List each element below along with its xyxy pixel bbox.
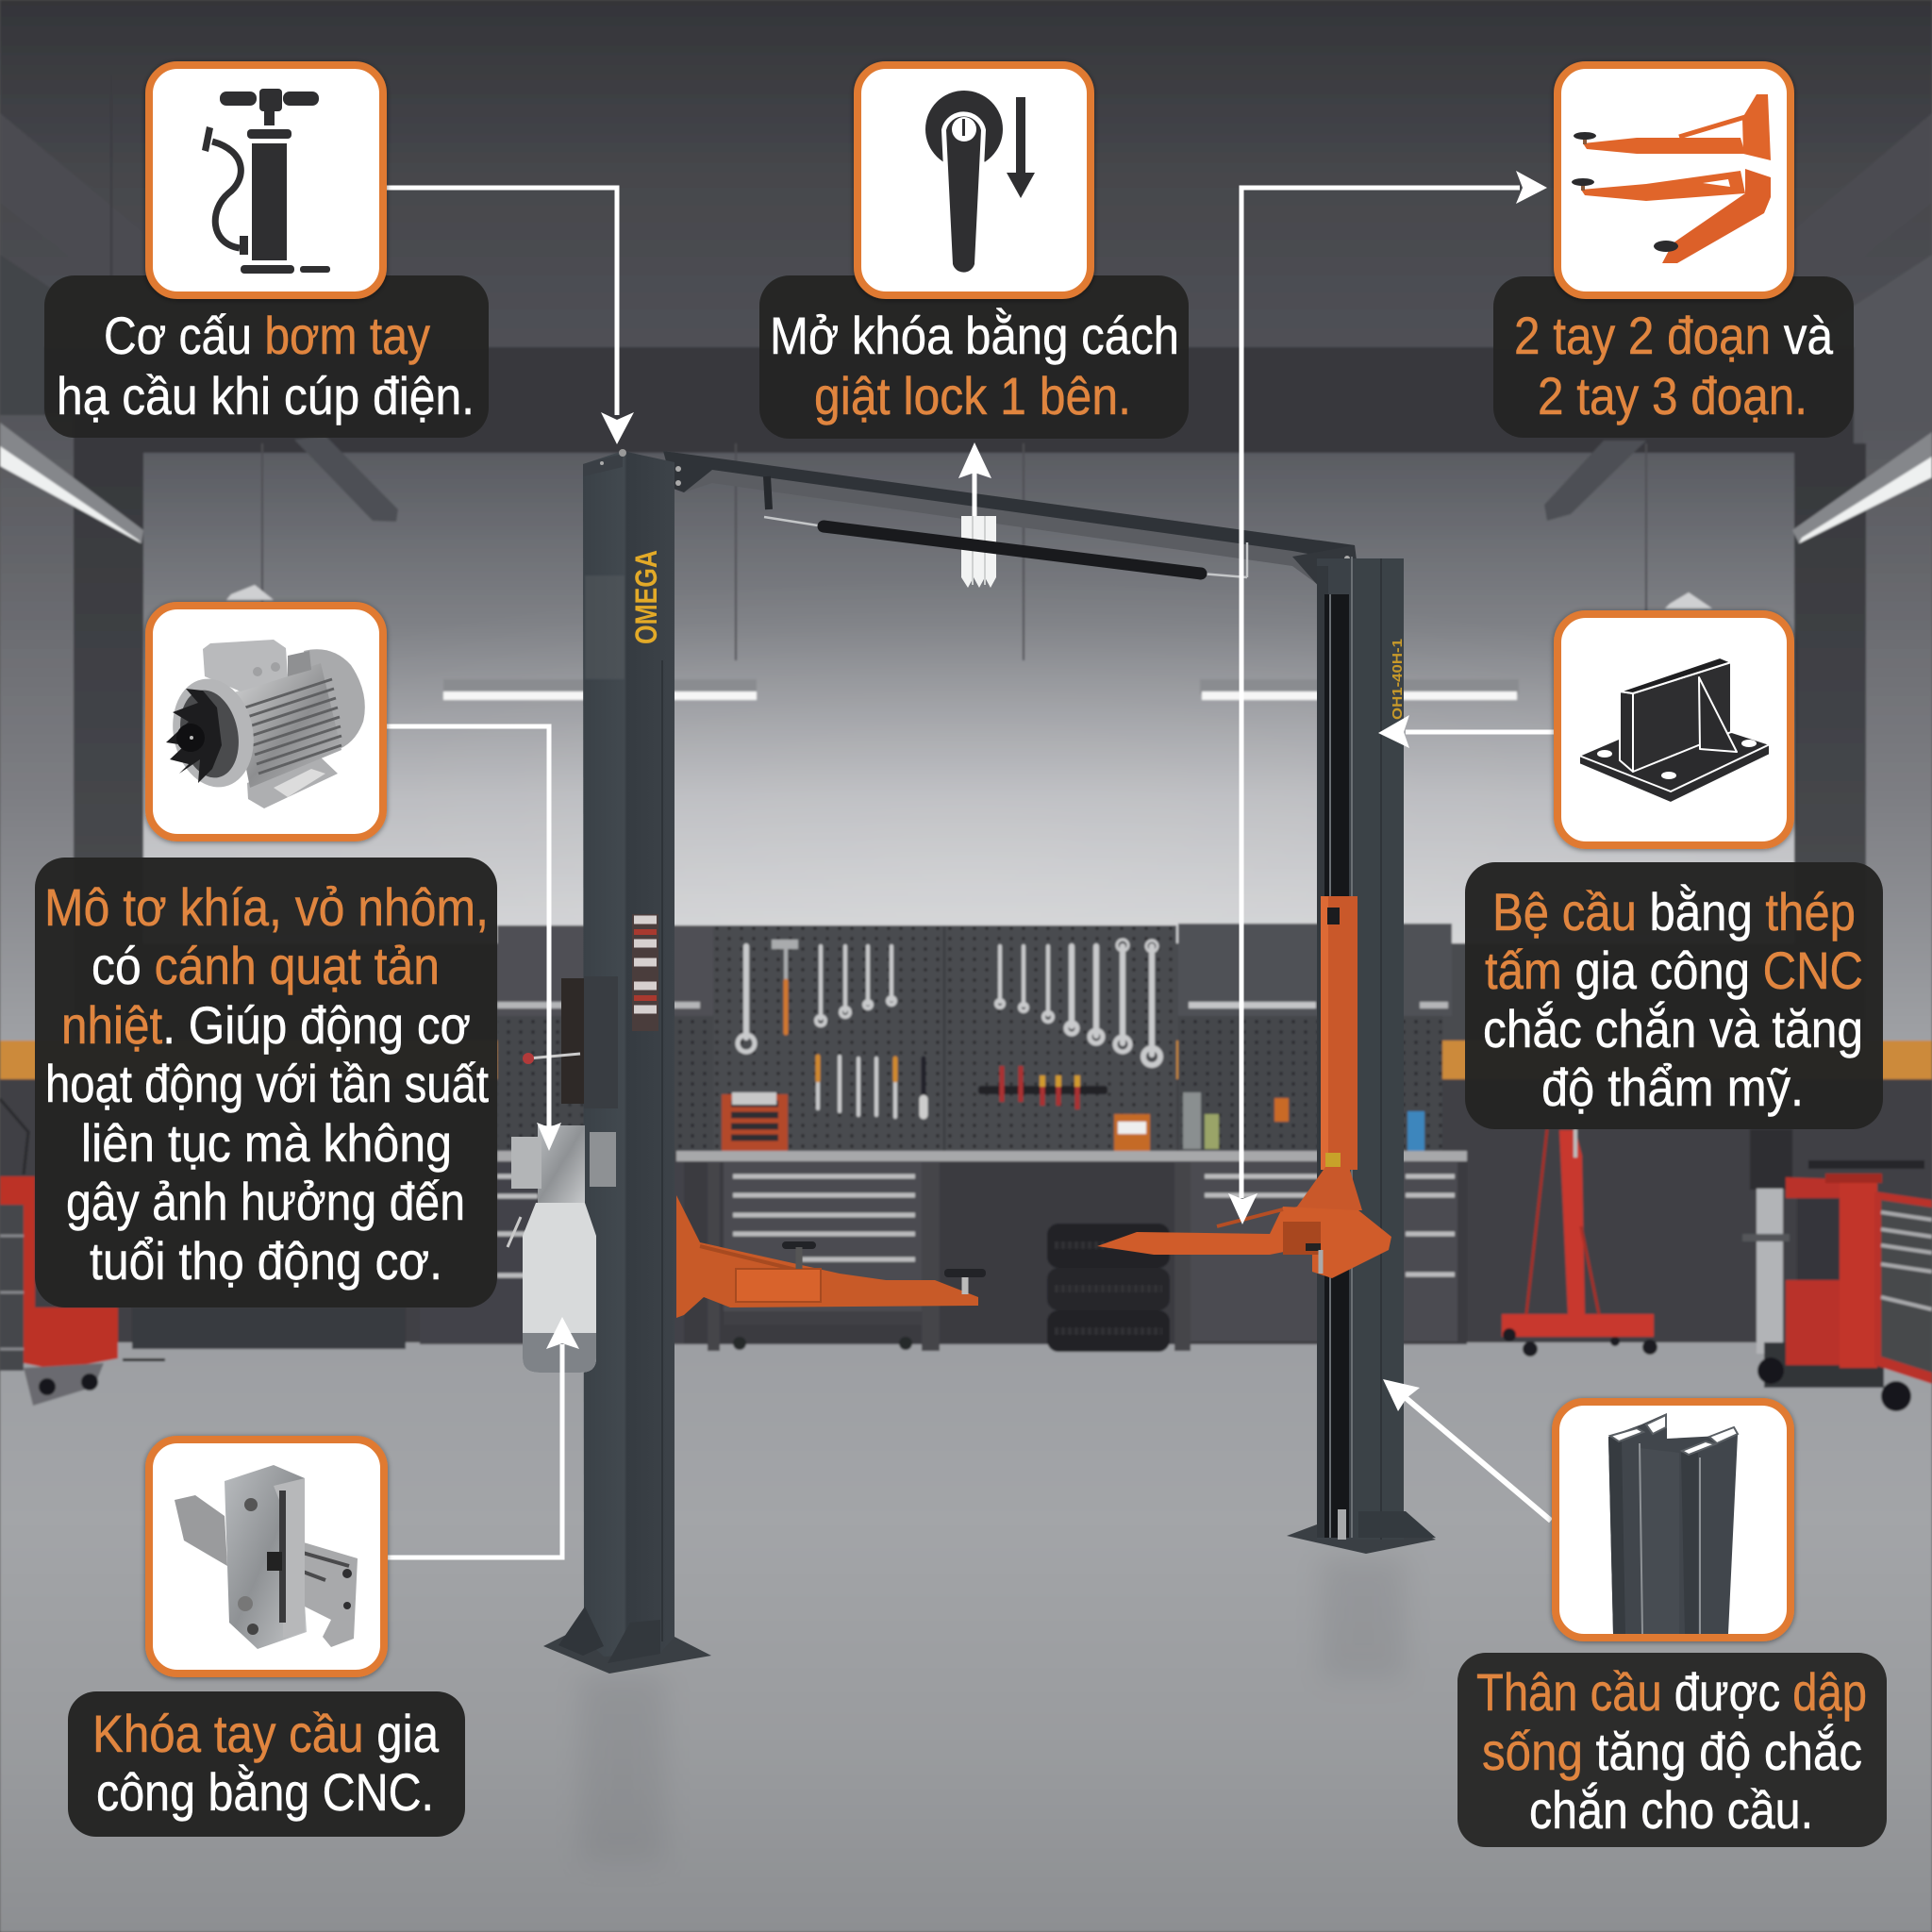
panel: column bbox=[1457, 1402, 1887, 1847]
hanging wrenches and tools bbox=[738, 940, 1160, 1117]
arrow: motor bbox=[387, 726, 561, 1151]
left red cabinet bbox=[0, 1099, 165, 1406]
caption: base bracket: Bệ cầu bằng thép bbox=[1492, 882, 1856, 941]
arrow: arms double-headed bbox=[1228, 171, 1547, 1224]
panel: lift arms bbox=[1493, 65, 1854, 438]
caption: column bbox=[1457, 1653, 1887, 1847]
icon: electric motor bbox=[163, 640, 365, 808]
caption: arm lock bbox=[68, 1691, 465, 1837]
caption: hand pump bbox=[44, 275, 489, 438]
left column bbox=[558, 449, 675, 1663]
pegboard bbox=[497, 925, 1442, 1153]
panel: arm lock bbox=[68, 1440, 465, 1837]
model text on right column: OH1-40H-1 bbox=[1390, 639, 1406, 720]
caption: base bracket bbox=[1465, 862, 1883, 1129]
screwdriver rack bbox=[978, 1066, 1108, 1109]
left lift arm bbox=[676, 1195, 986, 1318]
warning stickers bbox=[632, 914, 658, 1031]
brand text: OMEGA: OMEGA bbox=[629, 550, 663, 644]
caption: motor: Mô tơ khía, vỏ nhôm, bbox=[44, 877, 489, 937]
right column bbox=[1317, 557, 1436, 1540]
panel: hand pump bbox=[44, 65, 489, 438]
caption: motor: liên tục mà không bbox=[81, 1113, 452, 1173]
upper wall cabinets bbox=[497, 924, 1452, 1016]
workbench and drawer cabinets bbox=[132, 1151, 1467, 1351]
unlock cable rod bbox=[764, 476, 1247, 577]
overhead beam bbox=[663, 451, 1361, 589]
caption: base bracket: tấm gia công CNC bbox=[1485, 941, 1863, 1000]
right post base plate bbox=[1287, 1524, 1436, 1554]
caption: hand pump: Cơ cấu bơm tay bbox=[104, 306, 430, 365]
card: motor bbox=[149, 606, 383, 838]
panel: lock release bbox=[759, 65, 1189, 439]
stacked tires bbox=[1047, 1224, 1170, 1352]
left post base plate bbox=[543, 1626, 711, 1674]
hydraulic power unit bbox=[508, 976, 618, 1373]
red tool cart and tire machine bbox=[1742, 1129, 1932, 1411]
caption: arm lock: công bằng CNC. bbox=[96, 1762, 434, 1822]
icon: lock lever with down arrow bbox=[925, 91, 1035, 273]
red engine crane bbox=[1502, 1129, 1657, 1357]
center pendant light bbox=[961, 516, 996, 588]
caption: motor: hoạt động với tần suất bbox=[45, 1054, 489, 1113]
caption: motor: nhiệt. Giúp động cơ bbox=[61, 995, 471, 1055]
card: column bbox=[1556, 1402, 1790, 1638]
card: base bracket bbox=[1557, 614, 1790, 845]
arrow: lock release up bbox=[958, 442, 991, 516]
caption: base bracket: độ thẩm mỹ. bbox=[1541, 1058, 1804, 1117]
caption: lift arms: 2 tay 3 đoạn. bbox=[1538, 366, 1807, 425]
caption: motor bbox=[35, 858, 497, 1307]
caption: lock release: Mở khóa bằng cách bbox=[770, 306, 1179, 365]
panel: motor bbox=[35, 606, 497, 1307]
caption: motor: gây ảnh hưởng đến bbox=[66, 1172, 465, 1231]
icon: steel base bracket bbox=[1579, 658, 1770, 803]
arrow: cnc lock bbox=[388, 1317, 579, 1557]
ceiling light: left tube bbox=[0, 423, 143, 543]
caption: motor: tuổi thọ động cơ. bbox=[90, 1231, 442, 1291]
icon: hand pump bbox=[202, 89, 330, 274]
arrow: column bbox=[1383, 1379, 1551, 1521]
caption: hand pump: hạ cầu khi cúp điện. bbox=[57, 366, 475, 425]
items on workbench bbox=[722, 1092, 1424, 1151]
arrow: pump to post top bbox=[387, 188, 634, 444]
caption: base bracket: chắc chắn và tăng bbox=[1483, 999, 1863, 1058]
right carriage and lift arm bbox=[1097, 896, 1391, 1278]
icon: folded steel column bbox=[1608, 1413, 1738, 1634]
back wall lights bbox=[226, 585, 1712, 700]
two post lift bbox=[508, 449, 1436, 1674]
card: arm lock bbox=[149, 1440, 384, 1674]
ceiling light: right tube bbox=[1792, 432, 1932, 543]
arrow: base bracket bbox=[1378, 715, 1554, 748]
caption: column: Thân cầu được dập bbox=[1476, 1662, 1867, 1722]
panel: base bracket bbox=[1465, 614, 1883, 1129]
caption: arm lock: Khóa tay cầu gia bbox=[92, 1704, 440, 1763]
caption: lock release bbox=[759, 275, 1189, 439]
card: hand pump bbox=[149, 65, 383, 295]
caption: column: chắn cho cầu. bbox=[1529, 1780, 1813, 1840]
caption: lift arms bbox=[1493, 276, 1854, 438]
caption: motor: có cánh quạt tản bbox=[92, 936, 440, 995]
card: lift arms bbox=[1557, 65, 1790, 295]
card: lock release bbox=[858, 65, 1091, 295]
icon: CNC arm lock bbox=[175, 1465, 358, 1649]
caption: column: sống tăng độ chắc bbox=[1482, 1722, 1862, 1781]
caption: lock release: giật lock 1 bên. bbox=[814, 366, 1131, 425]
icon: orange lift arms bbox=[1572, 94, 1771, 263]
caption: lift arms: 2 tay 2 đoạn và bbox=[1514, 306, 1834, 365]
